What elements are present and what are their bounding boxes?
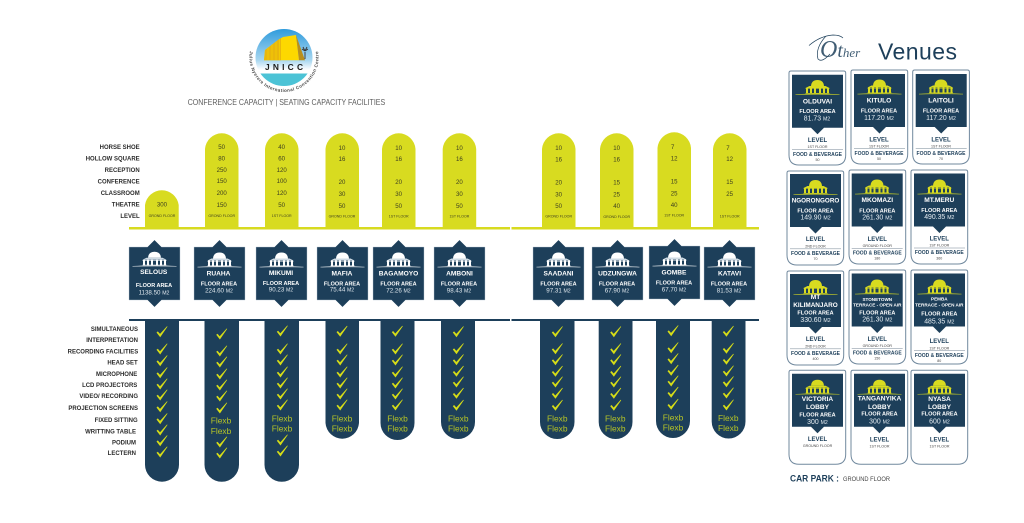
facilities row labels: FIXED SITTING <box>95 418 138 424</box>
capacity column: Katavi: 7 <box>726 145 730 152</box>
other venue card: Tanganyika Lobby: FLOOR AREA <box>861 412 898 418</box>
venue card: Amboni <box>434 240 485 307</box>
other venue card: Ngorongoro: 70 <box>814 257 818 261</box>
other venue card: Tanganyika Lobby <box>851 370 908 464</box>
other venue card: Mkomazi: MKOMAZI <box>862 197 893 204</box>
facilities row labels: RECORDING FACILITIES <box>68 350 138 356</box>
other venue card: Mt Kilimanjaro: MT <box>811 294 820 301</box>
other venue card: Mkomazi: 261.30 M2 <box>862 214 893 221</box>
heading: Other Venues: Venues <box>878 38 957 64</box>
other venue card: Kitulo: 1ST FLOOR <box>869 145 889 149</box>
other venue card: Pemba Terrace: 485.35 M2 <box>924 318 955 325</box>
other venue card: Stonetown Terrace: GROUND FLOOR <box>863 344 892 348</box>
other venue card: Mt. Meru <box>911 170 968 264</box>
capacity column: Mafia: 30 <box>339 191 346 198</box>
other venue card: Mkomazi: FLOOR AREA <box>859 208 895 214</box>
other venue card: Pemba Terrace: 1ST FLOOR <box>929 346 950 350</box>
other venue card: Mkomazi: GROUND FLOOR <box>863 244 892 248</box>
other venue card: Stonetown Terrace: 261.30 M2 <box>862 317 893 324</box>
facilities column: Ruaha: Flexb <box>211 416 232 426</box>
logo: JNICC <box>249 29 319 92</box>
other venue card: Ngorongoro: NGORONGORO <box>792 198 839 204</box>
venue card: Saadani: SAADANI <box>543 270 574 277</box>
other venue card: Olduvai: 50 <box>816 158 820 162</box>
capacity row labels: CLASSROOM <box>101 191 140 197</box>
venue card: Gombe: GOMBE <box>662 269 687 276</box>
other venue card: Nyasa Lobby: LEVEL <box>930 438 949 444</box>
venue card: Selous: SELOUS <box>140 269 168 276</box>
logo: JNICC: Julius Nyerere International Convention Centre <box>249 51 319 92</box>
facilities column: Gombe: Flexb <box>663 412 684 422</box>
capacity column: Saadani: 50 <box>555 203 563 210</box>
facilities column: Katavi <box>712 320 746 438</box>
other venue card: Pemba Terrace: TERRACE - OPEN AIR <box>915 302 964 308</box>
venue card: Mikumi: 90.23 M2 <box>269 287 293 294</box>
other venue card: Mt. Meru: FLOOR AREA <box>921 208 957 214</box>
other venue card: Victoria Lobby: GROUND FLOOR <box>803 444 833 448</box>
other venue card: Kitulo: KITULO <box>867 98 891 105</box>
venue card: Mikumi: FLOOR AREA <box>263 281 299 287</box>
other venue card: Kitulo: FOOD & BEVERAGE <box>855 151 904 157</box>
capacity column: Katavi <box>713 133 746 229</box>
capacity column: Mikumi: 120 <box>277 190 287 197</box>
capacity row labels: CONFERENCE <box>98 180 140 186</box>
other venue card: Olduvai: OLDUVAI <box>803 98 832 105</box>
other venue card: Victoria Lobby: LOBBY <box>806 404 830 411</box>
other venue card: Stonetown Terrace: TERRACE - OPEN AIR <box>853 302 902 308</box>
facilities column: Amboni: Flexb <box>448 423 469 433</box>
capacity column: Bagamoyo <box>382 133 416 229</box>
capacity column: Katavi: 1ST FLOOR <box>720 214 740 218</box>
capacity row labels: HORSE SHOE <box>100 145 140 151</box>
capacity column: Selous: 300 <box>157 202 168 209</box>
other venue card: Kitulo: 117.20 M2 <box>864 115 894 122</box>
other venue card: Mt. Meru: MT.MERU <box>924 197 955 204</box>
other venue card: Stonetown Terrace: LEVEL <box>868 337 887 343</box>
capacity column: Gombe <box>658 132 691 229</box>
other venue card: Tanganyika Lobby: LEVEL <box>870 438 889 444</box>
other venue card: Laitoli: FLOOR AREA <box>923 108 959 114</box>
facilities column: Gombe: Flexb <box>663 422 684 432</box>
venue card: Udzungwa <box>592 240 643 307</box>
other venue card: Laitoli: 1ST FLOOR <box>931 145 951 149</box>
venue card: Bagamoyo: 72.26 M2 <box>386 288 411 294</box>
other venue card: Tanganyika Lobby: 300 M2 <box>869 418 890 425</box>
capacity column: Amboni: 16 <box>456 156 463 163</box>
facilities column: Katavi: Flexb <box>718 413 739 423</box>
facilities column: Mikumi: Flexb <box>272 414 293 424</box>
facilities column: Katavi: Flexb <box>718 423 739 433</box>
capacity column: Udzungwa: GROND FLOOR <box>603 215 630 219</box>
capacity column: Amboni <box>443 133 476 229</box>
capacity column: Ruaha: 150 <box>217 202 227 209</box>
capacity column: Bagamoyo: 30 <box>395 191 403 198</box>
other venue card: Pemba Terrace: LEVEL <box>930 339 949 345</box>
other venue card: Ngorongoro: LEVEL <box>806 237 825 243</box>
venue card: Mafia: FLOOR AREA <box>324 282 360 288</box>
capacity column: Selous <box>145 190 179 229</box>
venue card: Udzungwa: UDZUNGWA <box>598 270 637 277</box>
other venue card: Stonetown Terrace: FLOOR AREA <box>859 311 895 317</box>
venue card: Ruaha: 224.60 M2 <box>205 287 233 294</box>
facilities column: Mafia: Flexb <box>332 424 353 434</box>
capacity column: Gombe: 1ST FLOOR <box>664 213 685 217</box>
other venue card: Ngorongoro: 149.90 M2 <box>800 215 831 222</box>
other venue card: Tanganyika Lobby: TANGANYIKA <box>858 396 901 403</box>
capacity row labels: THEATRE <box>112 202 140 208</box>
venue card: Udzungwa: 67.90 M2 <box>605 287 629 294</box>
venue card: Ruaha: FLOOR AREA <box>201 282 237 288</box>
capacity column: Bagamoyo: 50 <box>395 203 403 210</box>
capacity column: Amboni: 10 <box>456 145 463 152</box>
facilities row labels: MICROPHONE <box>96 372 137 378</box>
other venue card: Mt Kilimanjaro: 400 <box>812 357 818 361</box>
capacity column: Mafia: 10 <box>339 145 346 152</box>
facilities column: Ruaha <box>204 320 239 482</box>
other venue card: Kitulo: LEVEL <box>869 137 889 143</box>
venue card: Gombe: 67.70 M2 <box>662 286 686 293</box>
venue card: Udzungwa: FLOOR AREA <box>599 281 635 287</box>
facilities column: Bagamoyo: Flexb <box>387 424 408 434</box>
other venue card: Mt. Meru: 1ST FLOOR <box>929 244 950 248</box>
capacity column: Ruaha: 250 <box>217 167 227 174</box>
other venue card: Stonetown Terrace: STONETOWN <box>862 297 893 302</box>
other venue card: Pemba Terrace: FOOD & BEVERAGE <box>915 353 964 359</box>
capacity column: Udzungwa: 10 <box>613 145 621 152</box>
other venue card: Mt. Meru: LEVEL <box>930 236 949 242</box>
venue card: Amboni: AMBONI <box>446 270 473 277</box>
other venue card: Ngorongoro: FOOD & BEVERAGE <box>791 251 841 257</box>
facilities column: Bagamoyo: Flexb <box>387 414 408 424</box>
other venue card: Nyasa Lobby: LOBBY <box>928 404 952 411</box>
venue card: Selous: 1138.50 M2 <box>139 290 170 296</box>
capacity column: Mikumi: 50 <box>278 202 286 209</box>
facilities column: Gombe <box>656 320 690 438</box>
capacity column: Saadani: 16 <box>555 156 563 163</box>
other venue card: Mkomazi <box>849 170 906 264</box>
other venue card: Mt Kilimanjaro: KILIMANJARO <box>793 302 838 309</box>
other venue card: Nyasa Lobby <box>911 370 968 464</box>
capacity column: Mikumi: 60 <box>278 156 286 163</box>
capacity column: Amboni: 50 <box>456 203 463 210</box>
capacity column: Ruaha: 50 <box>218 144 226 151</box>
capacity row labels: LEVEL <box>120 214 140 220</box>
heading: Other Venues <box>809 35 957 64</box>
capacity column: Saadani <box>542 133 576 229</box>
other venue card: Mt. Meru: 360 <box>936 256 942 260</box>
other venue card: Stonetown Terrace <box>849 270 906 364</box>
venue card: Bagamoyo: BAGAMOYO <box>379 270 418 277</box>
capacity column: Mafia: 20 <box>339 179 346 186</box>
facilities column: Saadani <box>540 320 574 439</box>
venue card: Selous: FLOOR AREA <box>136 283 172 289</box>
capacity column: Katavi: 12 <box>726 156 734 163</box>
other venue card: Victoria Lobby: FLOOR AREA <box>799 413 836 419</box>
other venue card: Kitulo <box>851 70 908 164</box>
other venue card: Olduvai: LEVEL <box>808 138 827 144</box>
venue card: Mikumi <box>256 240 307 307</box>
capacity column: Gombe: 40 <box>671 202 678 209</box>
other venue card: Laitoli: 117.20 M2 <box>926 115 956 122</box>
other venue card: Pemba Terrace: PEMBA <box>931 297 948 302</box>
capacity column: Katavi: 15 <box>726 179 734 186</box>
capacity column: Gombe: 7 <box>671 144 675 151</box>
venue card: Amboni: 98.43 M2 <box>447 287 471 294</box>
venue card: Gombe: FLOOR AREA <box>656 280 692 286</box>
other venue card: Tanganyika Lobby: 1ST FLOOR <box>870 444 890 448</box>
venue card: Saadani: FLOOR AREA <box>540 281 577 287</box>
other venue card: Mkomazi: FOOD & BEVERAGE <box>853 250 902 256</box>
capacity column: Udzungwa: 25 <box>613 191 621 198</box>
car park note: CAR PARK : <box>790 474 839 484</box>
other venue card: Victoria Lobby: LEVEL <box>808 437 827 443</box>
capacity column: Saadani: 30 <box>555 191 563 198</box>
other venue card: Victoria Lobby: 300 M2 <box>807 419 828 426</box>
other venue card: Mkomazi: LEVEL <box>868 237 887 243</box>
other venue card: Ngorongoro <box>787 171 844 265</box>
capacity column: Katavi: 25 <box>726 191 734 198</box>
other venue card: Kitulo: FLOOR AREA <box>861 108 897 114</box>
heading: Other Venues: Other <box>820 37 861 63</box>
venue card: Selous <box>129 240 180 307</box>
facilities row labels: LECTERN <box>108 451 136 457</box>
other venue card: Mt Kilimanjaro: FLOOR AREA <box>797 310 834 316</box>
venue card: Mafia: MAFIA <box>332 270 353 277</box>
other venue card: Nyasa Lobby: 600 M2 <box>929 418 950 425</box>
capacity column: Amboni: 20 <box>456 179 463 186</box>
capacity column: Saadani: 20 <box>555 179 563 186</box>
facilities column: Udzungwa: Flexb <box>605 413 626 423</box>
capacity column: Ruaha: 150 <box>217 178 227 185</box>
other venue card: Mt. Meru: 490.35 M2 <box>924 214 955 221</box>
other venue card: Stonetown Terrace: FOOD & BEVERAGE <box>853 350 902 356</box>
venue card: Katavi <box>704 240 755 307</box>
capacity column: Mikumi: 100 <box>277 178 287 185</box>
car park note <box>790 474 891 484</box>
facilities row labels: WRITTING TABLE <box>85 430 136 436</box>
facilities column: Saadani: Flexb <box>547 423 568 433</box>
capacity column: Saadani: GROND FLOOR <box>545 214 572 218</box>
facilities row labels: PROJECTION SCREENS <box>68 406 138 412</box>
navy baseline <box>129 319 759 321</box>
other venue card: Laitoli: LEVEL <box>931 137 951 143</box>
other venue card: Mt Kilimanjaro <box>787 271 844 365</box>
capacity column: Udzungwa <box>600 133 634 229</box>
facilities column: Mafia: Flexb <box>332 414 353 424</box>
facilities column: Ruaha: Flexb <box>211 426 232 436</box>
other venue card: Pemba Terrace: FLOOR AREA <box>921 312 957 318</box>
yellow baseline <box>129 227 759 230</box>
other venue card: Mt Kilimanjaro: 2ND FLOOR <box>805 344 826 348</box>
capacity column: Mafia: GROND FLOOR <box>329 214 356 218</box>
other venue card: Olduvai: FLOOR AREA <box>799 109 836 115</box>
other venue card: Nyasa Lobby: FLOOR AREA <box>921 412 958 418</box>
other venue card: Tanganyika Lobby: LOBBY <box>868 404 892 411</box>
facilities column: Saadani: Flexb <box>547 413 568 423</box>
capacity row labels: HOLLOW SQUARE <box>86 156 140 162</box>
facilities column: Mikumi: Flexb <box>272 424 293 434</box>
facilities column: Amboni <box>441 320 475 439</box>
other venue card: Olduvai: FOOD & BEVERAGE <box>793 152 843 158</box>
capacity column: Bagamoyo: 1ST FLOOR <box>389 214 409 218</box>
capacity column: Selous: GROND FLOOR <box>149 214 176 218</box>
venue card: Amboni: FLOOR AREA <box>441 281 477 287</box>
other venue card: Mt Kilimanjaro: LEVEL <box>806 337 825 343</box>
capacity column: Gombe: 15 <box>671 178 678 185</box>
capacity column: Ruaha: 80 <box>218 156 226 163</box>
other venue card: Ngorongoro: 2ND FLOOR <box>805 244 826 248</box>
other venue card: Mt. Meru: FOOD & BEVERAGE <box>915 250 964 256</box>
car park note: GROUND FLOOR <box>843 477 891 483</box>
other venue card: Laitoli: LAITOLI <box>928 98 954 105</box>
facilities column: Udzungwa: Flexb <box>605 423 626 433</box>
capacity column: Udzungwa: 16 <box>613 156 621 163</box>
other venue card: Laitoli: 70 <box>939 157 943 161</box>
venue card: Katavi: 81.53 M2 <box>717 287 741 294</box>
facilities column: Bagamoyo <box>380 320 414 440</box>
capacity column: Mikumi: 1ST FLOOR <box>272 214 292 218</box>
other venue card: Stonetown Terrace: 150 <box>874 357 880 361</box>
venue card: Mikumi: MIKUMI <box>269 270 293 277</box>
venue card: Mafia <box>317 240 368 307</box>
capacity column: Bagamoyo: 10 <box>395 145 403 152</box>
other venue card: Laitoli <box>913 70 969 164</box>
other venue card: Kitulo: 50 <box>877 157 881 161</box>
facilities row labels: LCD PROJECTORS <box>82 383 137 389</box>
subtitle: CONFERENCE CAPACITY | SEATING CAPACITY FACILITIES <box>188 97 386 107</box>
other venue card: Olduvai: 81.73 M2 <box>804 116 830 122</box>
facilities row labels: INTERPRETATION <box>86 338 138 344</box>
other venue card: Pemba Terrace: 80 <box>937 359 941 363</box>
capacity column: Gombe: 25 <box>671 190 678 197</box>
capacity column: Bagamoyo: 20 <box>395 179 403 186</box>
other venue card: Mkomazi: 180 <box>874 257 880 261</box>
facilities row labels: HEAD SET <box>107 361 138 367</box>
other venue card: Olduvai: 1ST FLOOR <box>808 145 828 149</box>
capacity column: Saadani: 10 <box>555 145 563 152</box>
capacity column: Amboni: 30 <box>456 191 463 198</box>
other venue card: Mt Kilimanjaro: FOOD & BEVERAGE <box>791 351 841 357</box>
venue card: Saadani: 97.31 M2 <box>546 287 571 294</box>
venue card: Ruaha <box>194 240 245 307</box>
facilities column: Mafia <box>326 320 359 439</box>
other venue card: Nyasa Lobby: 1ST FLOOR <box>930 444 950 448</box>
capacity column: Amboni: 1ST FLOOR <box>449 214 470 218</box>
facilities column: Selous <box>145 320 179 482</box>
capacity column: Mafia: 16 <box>339 156 346 163</box>
facilities row labels: SIMULTANEOUS <box>91 327 138 333</box>
other venue card: Olduvai <box>789 71 846 165</box>
capacity row labels <box>86 145 140 220</box>
capacity column: Ruaha: GROND FLOOR <box>208 214 235 218</box>
capacity column: Mafia: 50 <box>339 203 346 210</box>
other venue card: Pemba Terrace <box>911 270 968 364</box>
capacity column: Ruaha <box>205 133 238 229</box>
capacity column: Mikumi <box>265 133 298 229</box>
other venue card: Victoria Lobby <box>789 370 846 464</box>
capacity column: Udzungwa: 15 <box>613 179 621 186</box>
facilities column: Udzungwa <box>599 320 632 439</box>
capacity column: Mafia <box>326 133 359 229</box>
logo: JNICC: JNICC <box>265 62 303 72</box>
capacity column: Ruaha: 200 <box>217 190 227 197</box>
capacity column: Udzungwa: 40 <box>613 203 621 210</box>
facilities row labels: PODIUM <box>112 441 136 447</box>
other venue card: Mt Kilimanjaro: 330.60 M2 <box>800 317 831 324</box>
other venue card: Victoria Lobby: VICTORIA <box>802 396 833 403</box>
capacity column: Mikumi: 120 <box>277 167 287 174</box>
other venue card: Laitoli: FOOD & BEVERAGE <box>917 151 966 157</box>
facilities column: Amboni: Flexb <box>448 413 469 423</box>
facilities row labels <box>68 327 138 457</box>
venue card: Saadani <box>533 240 584 307</box>
venue card: Bagamoyo: FLOOR AREA <box>380 282 417 288</box>
facilities row labels: VIDEO/ RECORDING <box>79 394 138 400</box>
facilities column: Mikumi <box>264 320 299 482</box>
venue card: Katavi: FLOOR AREA <box>711 281 747 287</box>
venue card: Katavi: KATAVI <box>718 270 741 277</box>
venue card: Bagamoyo <box>373 240 424 307</box>
capacity row labels: RECEPTION <box>105 168 140 174</box>
capacity column: Mikumi: 40 <box>278 144 286 151</box>
other venue card: Nyasa Lobby: NYASA <box>928 396 951 403</box>
venue card: Ruaha: RUAHA <box>207 270 231 277</box>
capacity column: Gombe: 12 <box>671 155 678 162</box>
other venue card: Ngorongoro: FLOOR AREA <box>797 209 834 215</box>
capacity column: Bagamoyo: 16 <box>395 156 403 163</box>
venue card: Mafia: 75.44 M2 <box>330 287 354 294</box>
venue card: Gombe <box>649 239 700 306</box>
